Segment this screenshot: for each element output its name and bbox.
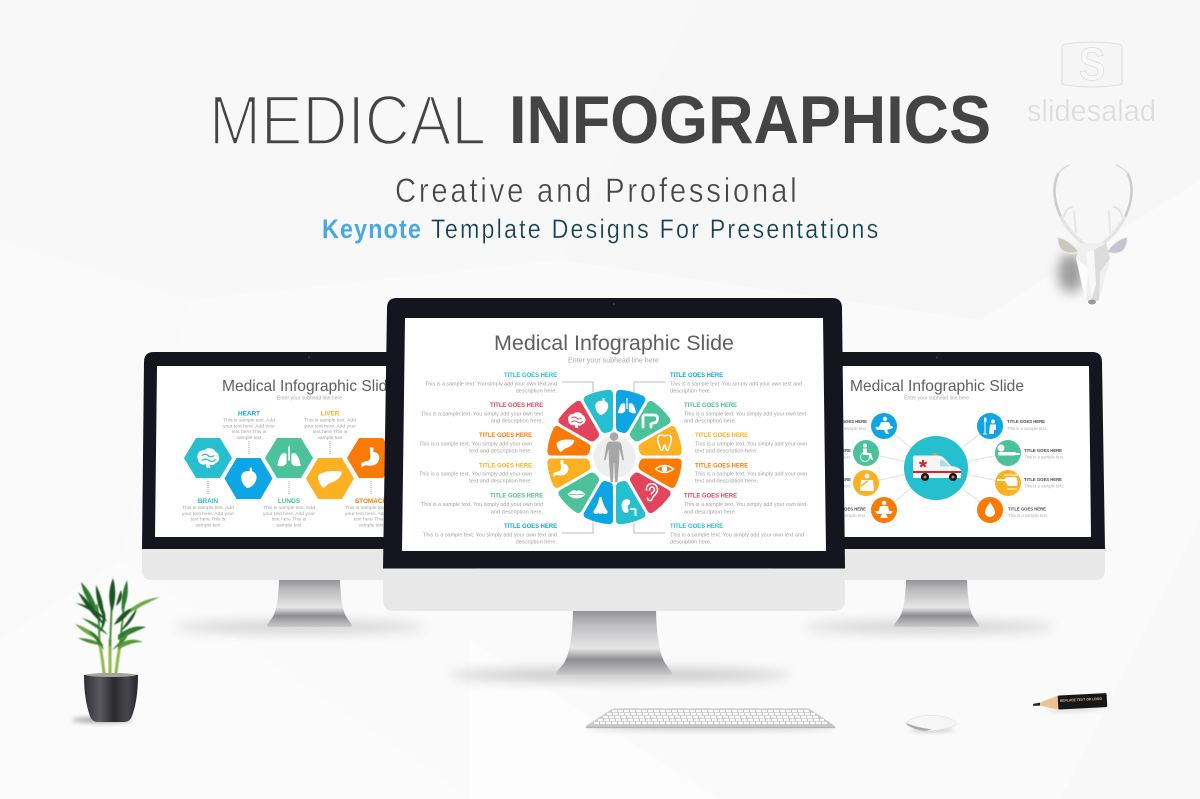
text block: heart: sample text <box>236 435 262 441</box>
camera: right monitor <box>936 356 938 358</box>
callout: left 2 red: TITLE GOES HERE <box>490 402 543 409</box>
callout: right 4 orange <box>695 462 807 484</box>
text block: heart: text here This is <box>232 429 267 435</box>
callout: right 3 yellow: TITLE GOES HERE <box>695 432 748 439</box>
callout: left 2 red: This is a sample text. You simply add your own text <box>421 412 543 418</box>
labels: right items: TITLE GOES HERE <box>1007 419 1046 425</box>
callout: right 6 teal: This is a sample text. You simply add your own text and <box>670 532 804 538</box>
segment: lungs <box>607 388 647 436</box>
plant in dark pot <box>72 578 160 723</box>
chin: center monitor <box>383 569 845 611</box>
monitor: right <box>772 352 1105 632</box>
connector lines <box>866 426 1008 510</box>
labels: right items: This is a sample text. <box>1008 513 1048 519</box>
text block: brain: your text here. Add your <box>182 511 234 517</box>
icon: heart <box>595 398 608 415</box>
labels: right items: TITLE GOES HERE <box>1024 448 1063 454</box>
callout: left 1 teal <box>425 372 557 394</box>
icon: ear <box>646 484 658 501</box>
hexagon: heart <box>224 458 272 499</box>
callout: left 4 yellow: This is a sample text. You simply add your own <box>419 472 532 478</box>
monitor: center <box>383 298 845 680</box>
segment: tooth <box>635 425 684 465</box>
connector lines: wheel callouts <box>562 382 665 533</box>
segment: intestines <box>622 399 673 450</box>
pencil <box>1033 693 1107 713</box>
labels: left items: This is a sample text. <box>827 426 867 432</box>
text block: stomach: your text here. Add your <box>345 511 397 517</box>
slide heading: center: Medical Infographic Slide <box>494 332 734 355</box>
callout: right 3 yellow <box>695 432 807 454</box>
callout: right 4 orange: This is a sample text. You simply add your own <box>695 472 807 478</box>
text block: liver: LIVER <box>321 410 340 418</box>
callout: right 2 green: and description here. <box>684 418 737 424</box>
text block: heart: HEART <box>238 410 260 418</box>
bezel: right monitor <box>772 352 1105 549</box>
text block: stomach: sample text <box>358 522 384 528</box>
callout: right 5 red: This is a sample text. You simply add your own text <box>684 502 806 508</box>
text block: brain: BRAIN <box>198 498 218 505</box>
icon: kidney <box>622 499 636 516</box>
callout: left 6 blue: TITLE GOES HERE <box>504 523 557 530</box>
segment: eye <box>635 449 684 489</box>
node: iv drip <box>977 413 1003 439</box>
node: patient <box>871 497 897 523</box>
node: wheelchair <box>853 440 879 466</box>
shadow: center monitor <box>450 670 790 680</box>
labels: left items: TITLE GOES HERE <box>813 448 852 454</box>
callout: left 3 orange: TITLE GOES HERE <box>479 432 532 439</box>
text block: liver <box>304 410 356 441</box>
text block: brain <box>182 498 234 528</box>
text block: heart: This is sample text. Add <box>223 418 275 424</box>
stand: left monitor <box>267 580 352 627</box>
monitor: left <box>142 352 476 632</box>
hexagon: liver <box>306 458 354 499</box>
screen: left monitor <box>155 366 470 537</box>
labels: right items <box>1007 419 1064 519</box>
subtitle: keynote template designs: Keynote <box>322 214 421 244</box>
pencil: REPLACE TEXT OR LOGO <box>1060 697 1102 703</box>
callout: left 6 blue <box>423 523 557 546</box>
bezel: center monitor <box>383 298 845 568</box>
icon: tooth <box>658 435 671 450</box>
labels: left items: TITLE GOES HERE <box>828 506 867 512</box>
hexagon: brain <box>184 438 232 478</box>
text block: brain: sample text <box>195 522 221 528</box>
text block: lungs: This is sample text. Add <box>263 505 315 511</box>
title <box>209 80 991 159</box>
labels: left items: This is a sample text. <box>826 513 866 519</box>
labels: left items: This is a sample text. <box>811 484 851 490</box>
camera: center monitor <box>613 303 615 305</box>
icon: brain <box>568 412 586 428</box>
labels: left items <box>811 419 868 519</box>
icon: eye <box>656 466 674 472</box>
node: injured arm <box>853 470 879 496</box>
segment: lips <box>556 464 607 515</box>
text block: stomach: This is sample text. Add <box>345 505 397 511</box>
hexagon: lungs <box>265 438 313 478</box>
screen: center monitor <box>402 318 826 551</box>
text block: lungs: sample text <box>276 522 302 528</box>
callout: right 6 teal: TITLE GOES HERE <box>670 523 723 530</box>
callout: right 1 blue <box>670 372 802 394</box>
callout: left 3 orange <box>419 432 532 454</box>
icon: nose <box>593 497 608 514</box>
labels: right items: This is a sample text. <box>1007 426 1047 432</box>
camera: left monitor <box>308 356 310 358</box>
node: blood drop <box>977 497 1003 523</box>
chin: right monitor <box>772 549 1105 580</box>
callout: right 5 red: and description here. <box>684 510 737 516</box>
callout: left 1 teal: description here. <box>516 388 557 394</box>
text block: lungs: text here This is <box>272 516 307 522</box>
text block: stomach: text here This is <box>354 516 389 522</box>
slide heading: right: Medical Infographic Slide <box>850 378 1024 395</box>
callout: right 5 red <box>684 492 806 516</box>
subtitle: creative and professional: Creative and Professional <box>395 171 797 210</box>
arrows: hexagon connectors <box>208 441 371 495</box>
callout: right 4 orange: TITLE GOES HERE <box>695 462 748 470</box>
callout: right 2 green: This is a sample text. You simply add your own text <box>684 412 806 418</box>
segment: nose <box>582 478 622 526</box>
mouse <box>906 715 956 732</box>
icon: lips <box>568 490 586 498</box>
callout: right 5 red: TITLE GOES HERE <box>684 492 737 500</box>
callout: left 4 yellow: text and description here. <box>469 478 532 484</box>
labels: left items: TITLE GOES HERE <box>813 477 852 483</box>
text block: lungs <box>263 498 315 528</box>
callout: left 3 orange: This is a sample text. You simply add your own <box>419 442 532 448</box>
slide heading: left: Medical Infographic Slide <box>222 378 396 395</box>
callout: right 1 blue: TITLE GOES HERE <box>670 372 723 379</box>
callout: right 2 green <box>684 402 806 424</box>
callout: right 2 green: TITLE GOES HERE <box>684 402 737 409</box>
callout: left 5 green <box>421 492 543 516</box>
text block: heart <box>223 410 275 441</box>
pot <box>84 673 138 722</box>
callout: right 1 blue: description here. <box>670 388 712 394</box>
node: stretcher <box>995 440 1021 466</box>
callout: left 1 teal: TITLE GOES HERE <box>504 372 557 379</box>
segment: kidney <box>607 478 647 526</box>
callout: left 6 blue: description here. <box>516 540 557 546</box>
text block: liver: This is sample text. Add <box>304 418 356 424</box>
slide heading: center <box>494 332 734 364</box>
shadow: left monitor <box>175 622 425 632</box>
callout: right 1 blue: This is a sample text. You simply add your own text and <box>670 382 802 388</box>
title: MEDICAL <box>209 80 486 159</box>
text block: stomach <box>345 498 397 528</box>
labels: left items: TITLE GOES HERE <box>829 419 868 425</box>
keyboard <box>585 708 835 731</box>
screen: right monitor <box>775 366 1091 537</box>
wheel: twelve organ segments <box>545 388 684 526</box>
callout: right 3 yellow: text and description here. <box>695 448 758 454</box>
stand: right monitor <box>894 580 979 627</box>
node: surgery <box>871 413 897 439</box>
labels: right items: TITLE GOES HERE <box>1008 506 1047 512</box>
title: INFOGRAPHICS <box>509 82 991 158</box>
callout: left 5 green: TITLE GOES HERE <box>490 492 543 500</box>
chin: left monitor <box>142 549 476 580</box>
segment: brain <box>556 399 607 450</box>
stand: center monitor <box>556 611 672 675</box>
icon: stomach <box>554 460 568 477</box>
callout: left 2 red <box>421 402 543 424</box>
logo: slidesalad: slidesalad <box>1027 93 1156 128</box>
text block: liver: your text here. Add your <box>304 424 356 430</box>
labels: right items: This is a sample text. <box>1024 454 1064 460</box>
bezel: left monitor <box>142 352 470 549</box>
hub: human figure <box>594 432 636 482</box>
labels: right items: This is a sample text. <box>1024 484 1064 490</box>
shadow: plant <box>72 717 132 723</box>
logo: slidesalad <box>1027 39 1156 128</box>
slide heading: right: Enter your subhead line here <box>904 396 969 402</box>
text block: lungs: LUNGS <box>278 498 301 505</box>
callout: right 6 teal <box>670 523 804 546</box>
text block: brain: text here This is <box>191 516 226 522</box>
icon: liver <box>556 439 574 452</box>
text block: brain: This is sample text. Add <box>182 505 234 511</box>
callout: left 5 green: This is a sample text. You simply add your own text <box>421 502 543 508</box>
callout: left 6 blue: This is a sample text. You simply add your own text and <box>423 532 557 538</box>
callout: left 2 red: and description here. <box>491 418 543 424</box>
hub: ambulance <box>904 436 968 500</box>
callout: left 4 yellow <box>419 462 532 484</box>
text block: liver: text here This is <box>313 429 348 435</box>
slide heading: left: Enter your subhead line here <box>277 396 342 402</box>
shadow: right monitor <box>805 622 1055 632</box>
icon: lungs <box>618 398 636 413</box>
icon: white deer head <box>1054 165 1132 304</box>
callout: right 6 teal: description here. <box>670 540 712 546</box>
subtitle: keynote template designs: Template Designs For Presentations <box>431 214 878 244</box>
callout: left 3 orange: text and description here. <box>469 448 532 454</box>
leaves and stems <box>75 578 160 673</box>
callout: right 3 yellow: This is a sample text. You simply add your own <box>695 442 807 448</box>
segment: liver <box>545 425 594 465</box>
text block: stomach: STOMACH <box>355 498 387 505</box>
labels: left items: This is a sample text. <box>811 454 851 460</box>
segment: heart <box>582 388 622 436</box>
hexagon: stomach <box>347 438 395 478</box>
text block: liver: sample text <box>317 435 343 441</box>
callout: left 4 yellow: TITLE GOES HERE <box>479 462 532 470</box>
segment: stomach <box>545 449 594 489</box>
labels: right items: TITLE GOES HERE <box>1024 477 1063 483</box>
callout: right 4 orange: text and description here. <box>695 478 758 484</box>
text block: heart: your text here. Add your <box>223 424 275 430</box>
node: helicopter <box>995 470 1021 496</box>
slide heading: center: Enter your subhead line here <box>568 358 659 364</box>
text block: lungs: your text here. Add your <box>263 511 315 517</box>
logo: slidesalad: S <box>1079 39 1105 91</box>
callout: left 5 green: and description here. <box>491 510 543 516</box>
callout: left 1 teal: This is a sample text. You simply add your own text and <box>425 382 557 388</box>
icon: intestines <box>643 415 658 427</box>
segment: ear <box>622 464 673 515</box>
